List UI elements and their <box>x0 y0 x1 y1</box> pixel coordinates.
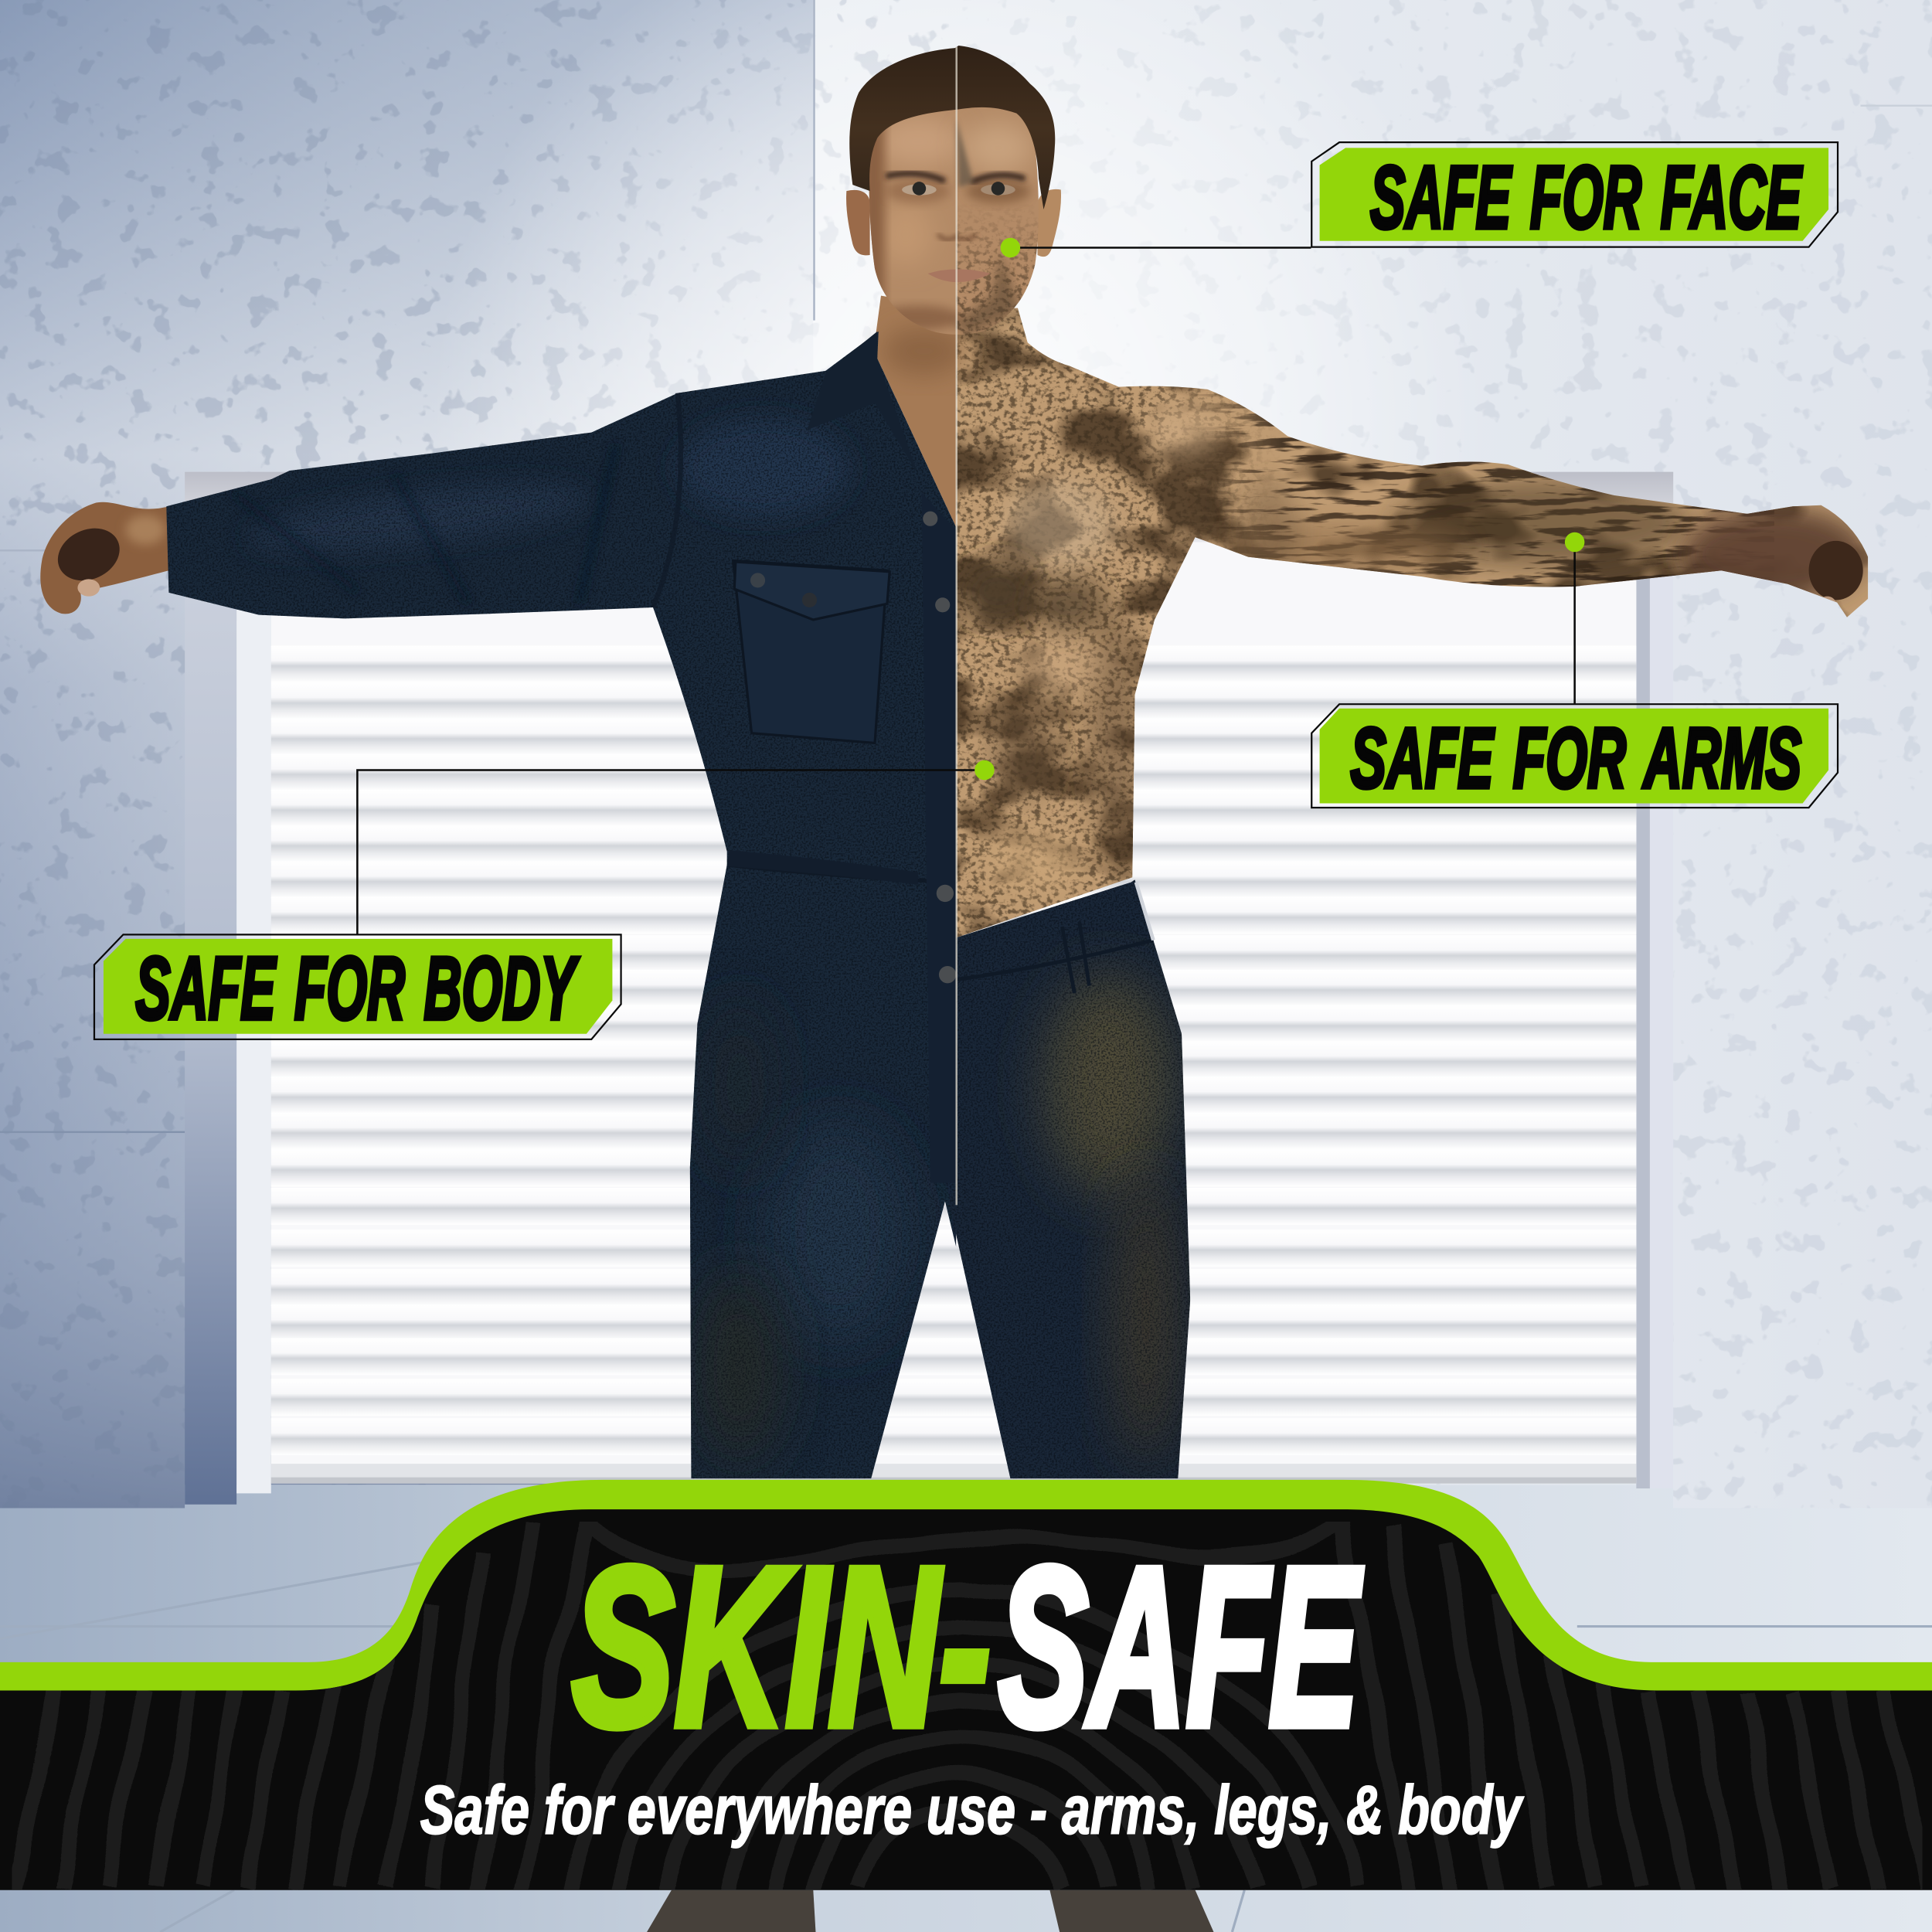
roller shutter slats <box>271 543 1636 1484</box>
green tag <box>104 939 612 1034</box>
right door jamb <box>1636 543 1673 1488</box>
top door frame <box>185 472 1673 549</box>
belt loop <box>1136 883 1153 940</box>
left door column <box>185 472 236 1505</box>
forehead mud streak <box>956 118 974 187</box>
right trouser leg <box>943 875 1196 1485</box>
ears <box>846 190 870 255</box>
coverall buttons <box>923 512 956 983</box>
mud on torso and arm <box>956 308 1874 949</box>
outline <box>1311 142 1838 247</box>
green banner border <box>0 1480 1932 1700</box>
coverall: left sleeve, torso and left leg <box>160 321 961 1503</box>
callout: safe for face <box>1001 142 1838 257</box>
headline: safe: SAFE <box>998 1520 1364 1774</box>
left hand <box>40 502 168 614</box>
left boot <box>647 1890 815 1932</box>
callout: safe for arms <box>1311 532 1838 808</box>
subtitle: Safe for everywhere use - arms, legs, & body <box>420 1770 1524 1848</box>
dot <box>1565 532 1584 552</box>
placket <box>922 493 956 1183</box>
left skin: neck and chest opening <box>876 296 956 527</box>
headline <box>572 1520 1364 1774</box>
label text: SAFE FOR BODY <box>135 940 580 1039</box>
trouser grain <box>943 875 1196 1485</box>
waistband <box>727 850 918 885</box>
leader line <box>1010 247 1311 248</box>
fabric folds <box>234 419 912 1466</box>
sleeve shading <box>653 393 681 607</box>
green tag <box>1320 148 1828 241</box>
right skin: shoulder, arm and torso <box>956 308 1868 937</box>
bottom banner <box>0 1480 1932 1890</box>
dot <box>975 760 995 780</box>
right boot <box>1049 1890 1213 1932</box>
face <box>862 87 1047 351</box>
fingerprint pattern <box>12 1522 1922 1890</box>
hair <box>849 46 1055 209</box>
leader line <box>357 770 985 934</box>
collar <box>807 332 918 474</box>
head <box>846 46 1061 351</box>
background: floor <box>0 1485 1932 1932</box>
brows <box>886 173 1026 182</box>
centre split line <box>955 47 957 1205</box>
roller door and frame <box>185 472 1673 1505</box>
left door jamb <box>236 543 271 1493</box>
eyes <box>902 182 1015 196</box>
outline <box>1311 704 1838 808</box>
mouth <box>928 269 991 282</box>
background: warehouse wall <box>0 0 1932 1515</box>
trouser highlights and seams <box>727 865 1153 993</box>
nose <box>937 234 976 240</box>
leader line <box>1574 543 1576 703</box>
headline: skin: SKIN- <box>572 1520 991 1774</box>
dot <box>1001 238 1020 257</box>
outline <box>94 934 621 1039</box>
chest pocket <box>733 560 889 743</box>
callout: safe for body <box>94 760 995 1039</box>
mud staining on right trouser <box>1045 974 1178 1466</box>
green tag <box>1320 709 1828 804</box>
fabric grain <box>160 321 961 1503</box>
neck shadow <box>883 327 966 376</box>
black banner body <box>0 1509 1932 1890</box>
